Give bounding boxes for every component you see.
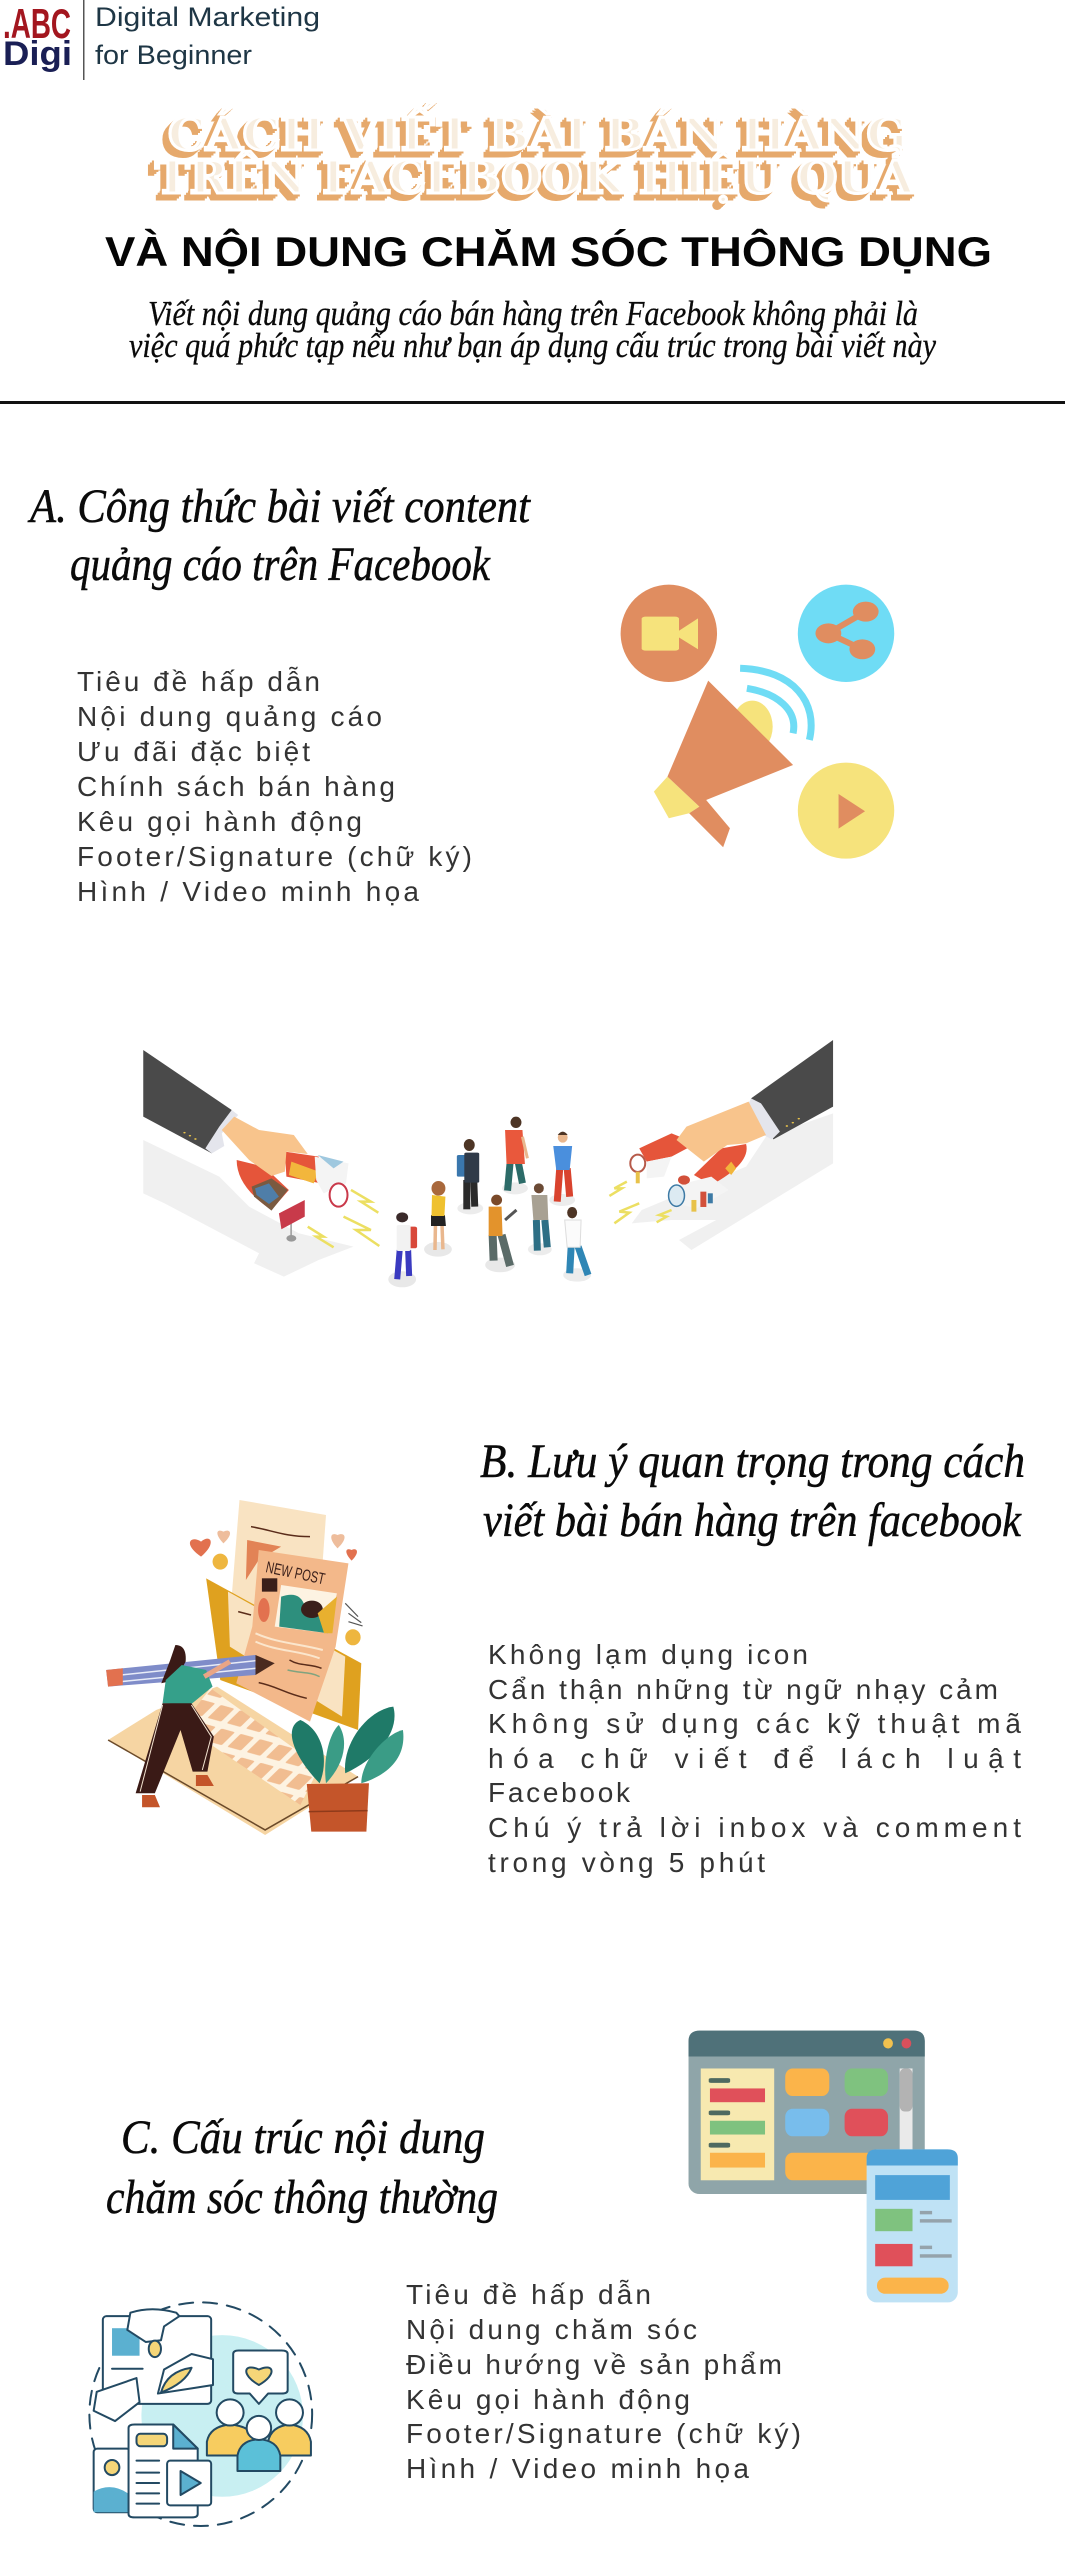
- media cards: [94, 2425, 211, 2517]
- list: section B: hóa chữ viết để lách luật: [488, 1743, 1021, 1774]
- woman with pencil: [106, 1645, 275, 1807]
- list: section A: Ưu đãi đặc biệt: [77, 736, 310, 767]
- list: section C: Điều hướng về sản phẩm: [406, 2349, 782, 2380]
- list: section A: Footer/Signature (chữ ký): [77, 841, 472, 872]
- person 7: [485, 1195, 516, 1272]
- laptop screen: [206, 1578, 361, 1730]
- three people: [207, 2399, 311, 2471]
- list: section B: trong vòng 5 phút: [488, 1847, 765, 1878]
- heading: section C: C. Cấu trúc nội dung: [121, 2111, 485, 2164]
- illustration: woman writing a new post on laptop: [106, 1500, 403, 1835]
- laptop base: [108, 1687, 358, 1835]
- icon: share circle: [798, 585, 894, 682]
- front paper post: [236, 1550, 348, 1722]
- icon: play circle: [798, 763, 894, 859]
- title: orange block heading: TRÊN FACEBOOK HIỆU QUẢ: [155, 145, 915, 204]
- title: orange block heading: CÁCH VIẾT BÀI BÁN HÀNG: [168, 102, 907, 161]
- logo: ABC Digi: for Beginner: [95, 40, 252, 70]
- potted plant: [292, 1707, 403, 1832]
- person 6: [528, 1183, 552, 1255]
- keyboard: [182, 1688, 320, 1805]
- list: section A: [77, 666, 472, 907]
- list: section C: Kêu gọi hành động: [406, 2384, 690, 2415]
- heading: section A: quảng cáo trên Facebook: [70, 538, 491, 591]
- person 1: [388, 1212, 417, 1287]
- logo: ABC Digi: Digital Marketing: [95, 2, 320, 32]
- icon: megaphone with media circles: [621, 585, 894, 859]
- list: section C: Tiêu đề hấp dẫn: [406, 2279, 651, 2310]
- people group: [388, 1117, 591, 1287]
- label: new post: NEW POST: [264, 1559, 327, 1588]
- left hand with magnet: [143, 1050, 379, 1247]
- illustration: browser window and phone: [689, 2031, 958, 2302]
- list: section B: Không sử dụng các kỹ thuật mã: [488, 1708, 1021, 1739]
- phone: [867, 2149, 958, 2302]
- person 2: [424, 1181, 452, 1257]
- list: section B: Chú ý trả lời inbox và comment: [488, 1812, 1021, 1843]
- list: section C: Nội dung chăm sóc: [406, 2314, 697, 2345]
- list: section B: [488, 1639, 1021, 1878]
- aqua backdrop: [141, 2335, 303, 2497]
- browser window: [689, 2031, 925, 2194]
- heading: section C: chăm sóc thông thường: [106, 2171, 498, 2224]
- list: section A: Nội dung quảng cáo: [77, 701, 382, 732]
- heading: section A: [27, 480, 531, 591]
- subtitle heading: VÀ NỘI DUNG CHĂM SÓC THÔNG DỤNG: [105, 227, 992, 275]
- icon: megaphone: [654, 668, 811, 847]
- heading: section C: [106, 2111, 498, 2224]
- intro text: Viết nội dung quảng cáo bán hàng trên Facebook không phải là: [148, 294, 918, 333]
- list: section C: Hình / Video minh họa: [406, 2453, 749, 2484]
- heading: section A: A. Công thức bài viết content: [27, 480, 531, 533]
- right hand with magnet: [609, 1040, 833, 1223]
- logo: ABC Digi: [3, 0, 320, 80]
- list: section B: Cẩn thận những từ ngữ nhạy cảm: [488, 1674, 998, 1705]
- heading: section B: [480, 1435, 1025, 1547]
- floor shadows: [143, 1113, 833, 1277]
- speech bubble with heart: [233, 2351, 288, 2404]
- list: section C: [406, 2279, 801, 2484]
- title: orange block heading: [155, 102, 915, 204]
- list: section A: Tiêu đề hấp dẫn: [77, 666, 320, 697]
- icon: video circle: [621, 585, 717, 682]
- list: section B: Không lạm dụng icon: [488, 1639, 808, 1670]
- list: section A: Kêu gọi hành động: [77, 806, 362, 837]
- illustration: magnets attracting customers: [143, 1040, 833, 1287]
- person 5: [549, 1132, 575, 1206]
- list: section A: Hình / Video minh họa: [77, 876, 419, 907]
- logo: ABC Digi: Digi: [3, 35, 72, 73]
- hearts and smileys: [190, 1531, 361, 1645]
- person 8: [563, 1207, 591, 1282]
- person 3: [457, 1139, 483, 1214]
- intro text: việc quá phức tạp nếu như bạn áp dụng cấu trúc trong bài viết này: [129, 326, 936, 365]
- list: section C: Footer/Signature (chữ ký): [406, 2418, 801, 2449]
- intro text: [129, 294, 936, 365]
- dashed circle: [89, 2302, 312, 2526]
- list: section A: Chính sách bán hàng: [77, 771, 395, 802]
- document with hands: [94, 2309, 213, 2421]
- decorative burst lines: [345, 1603, 363, 1626]
- person 4: [502, 1117, 528, 1194]
- illustration: content and community icon: [89, 2302, 312, 2526]
- logo: ABC Digi: .ABC: [3, 0, 71, 47]
- list: section B: Facebook: [488, 1777, 631, 1808]
- back paper: [228, 1500, 326, 1643]
